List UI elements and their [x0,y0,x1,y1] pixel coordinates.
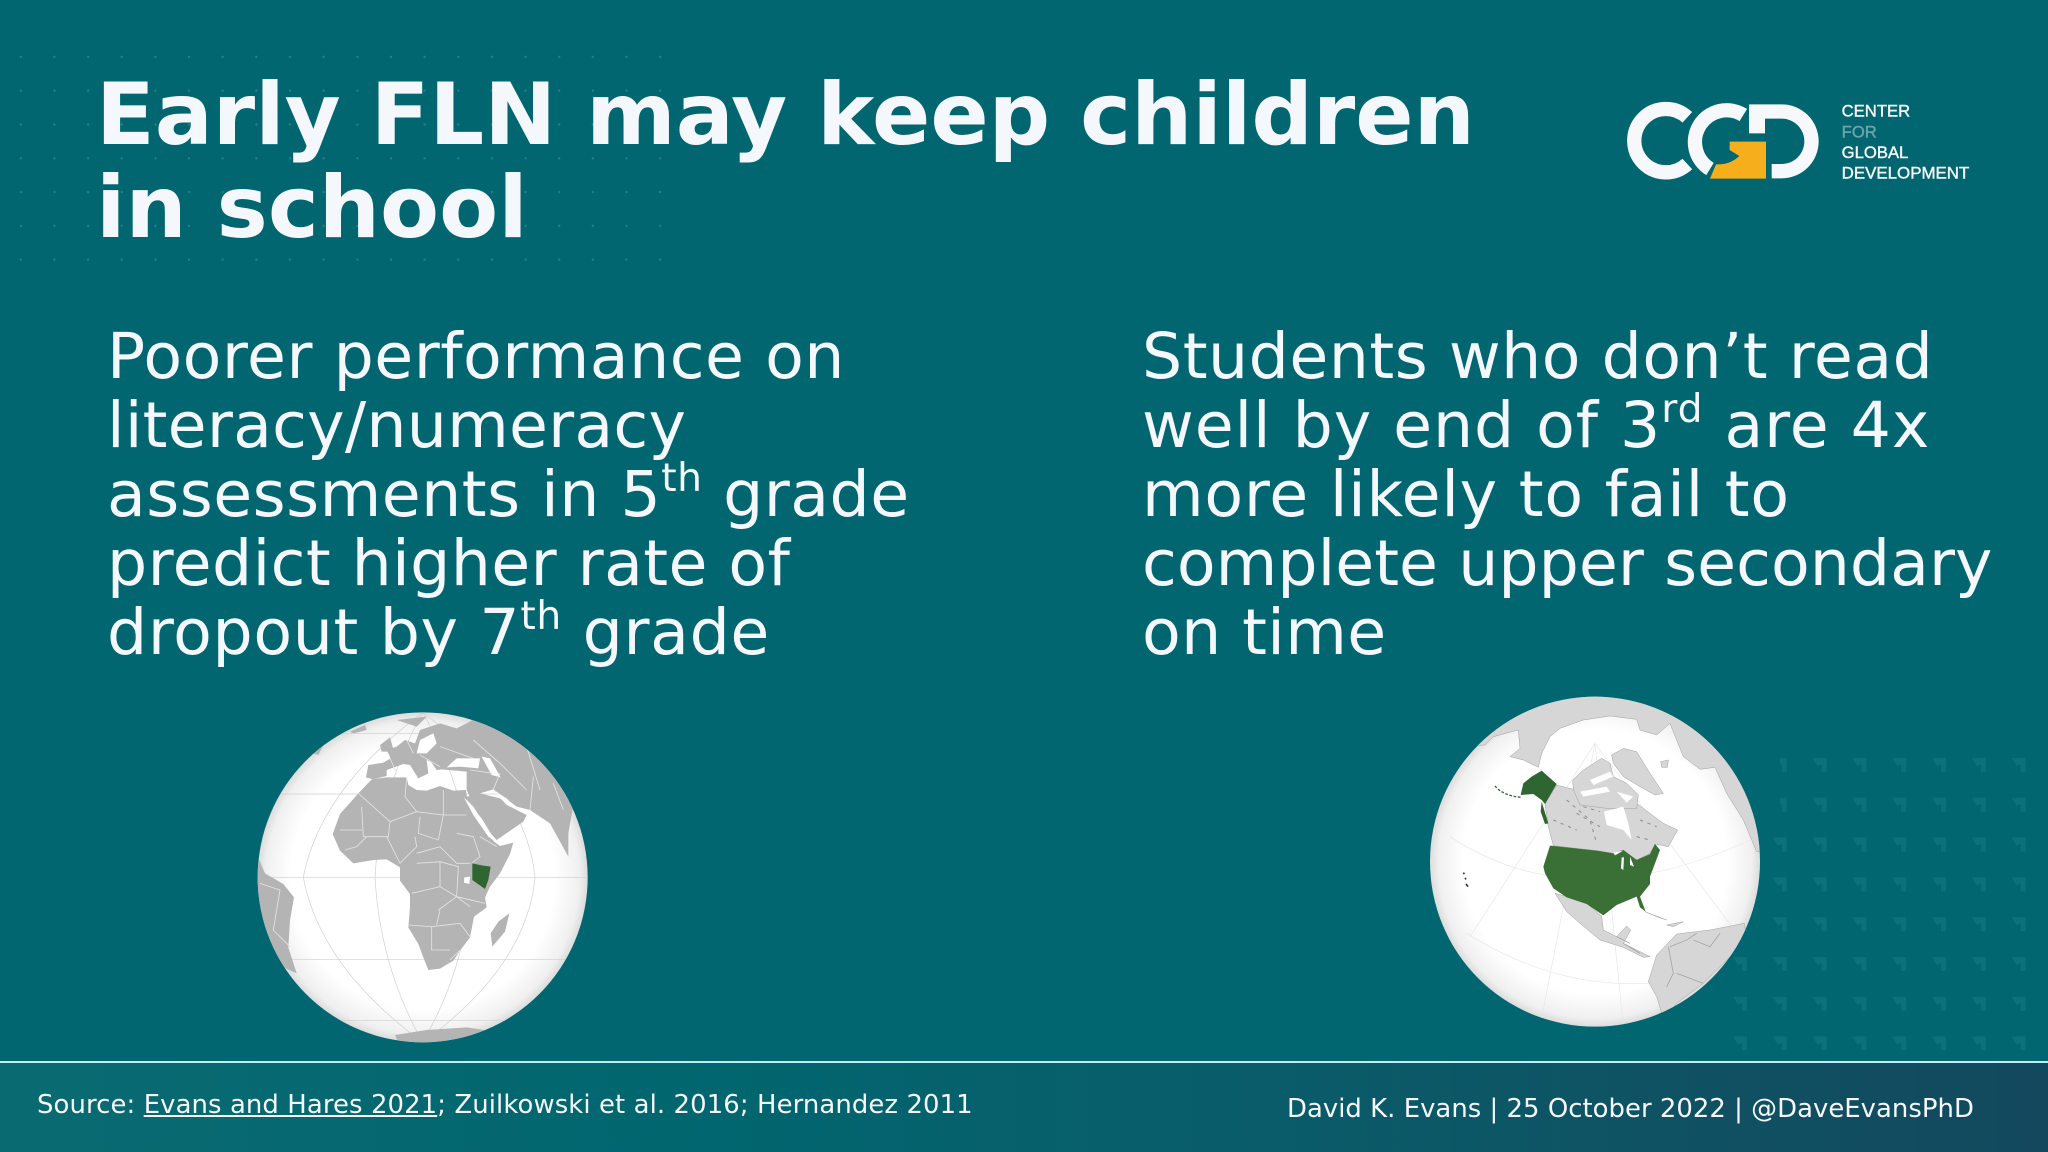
Hudson Bay and inland waters [1580,772,1633,840]
Kenya [472,863,491,889]
South America [1648,923,1747,1018]
source citation: Source: Evans and Hares 2021; Zuilkowski et al. 2016; Hernandez 2011 [37,1090,973,1120]
presenter credit: David K. Evans | 25 October 2022 | @DaveEvansPhD [1287,1094,1974,1124]
logo wordmark: GLOBAL [1842,143,1908,162]
text block: left finding: literacy/numeracy [107,388,686,462]
Eurasia [366,720,573,856]
text block: left finding: assessments in 5th grade [107,456,910,531]
footer bar [0,1063,2048,1152]
title [96,65,1475,258]
Canadian Arctic islands [1573,758,1638,808]
Great Lakes [1613,851,1634,870]
text block: left finding: predict higher rate of [107,526,790,600]
Madagascar [491,913,509,947]
text block: right finding [1142,319,1993,669]
graticule [1450,743,1750,1027]
logo wordmark: DEVELOPMENT [1842,164,1969,183]
text block: left finding: dropout by 7th grade [107,594,770,669]
inland seas [417,733,518,884]
text block: right finding: well by end of 3rd are 4x [1142,387,1930,462]
globe: Kenya highlighted on Africa view [258,712,588,1042]
text block: right finding: on time [1142,595,1387,669]
landmasses [250,715,593,1047]
Arabia [464,793,527,840]
globe sphere [1430,697,1760,1027]
Mexico and Central America [1555,893,1650,957]
globe: United States highlighted on North America view [1430,696,1760,1027]
Iceland [1661,760,1668,767]
South America [258,859,296,974]
text block: left finding: Poorer performance on [107,319,845,393]
Antarctica [395,1027,485,1042]
Aleutian islands [1495,786,1522,797]
text block: left finding [107,319,910,669]
Cuba and Caribbean [1645,912,1683,927]
landmasses [1478,696,1760,1013]
Siberia and Eurasia [1478,696,1760,852]
Africa [333,777,513,970]
text block: right finding: complete upper secondary [1142,526,1993,600]
logo wordmark [1842,102,1969,183]
logo letter G [1695,110,1743,169]
Canada [1545,785,1678,860]
text block: right finding: more likely to fail to [1142,457,1790,531]
United Kingdom and Ireland [380,737,394,752]
text block: right finding: Students who don’t read [1142,319,1933,393]
country borders [260,740,563,960]
Arctic islands [350,717,427,733]
title: in school [96,158,528,258]
logo wordmark: CENTER [1842,102,1910,121]
logo letter C [1634,109,1687,172]
footer divider line [0,1061,2048,1063]
Greenland [1612,748,1663,795]
Hawaii [1463,873,1468,887]
contiguous United States [1543,844,1660,915]
logo arrow [1710,142,1766,179]
globe sphere [258,712,588,1042]
title: Early FLN may keep children [96,65,1475,165]
logo wordmark: FOR [1842,122,1877,141]
Canadian lakes and island edges [1553,800,1657,843]
background dot pattern [20,56,662,261]
graticule [260,712,587,1042]
Alaska [1521,771,1557,824]
South America borders [1617,933,1720,987]
logo: Center for Global Development [1627,102,1970,183]
Greenland [313,745,323,755]
logo letter D [1749,104,1819,178]
